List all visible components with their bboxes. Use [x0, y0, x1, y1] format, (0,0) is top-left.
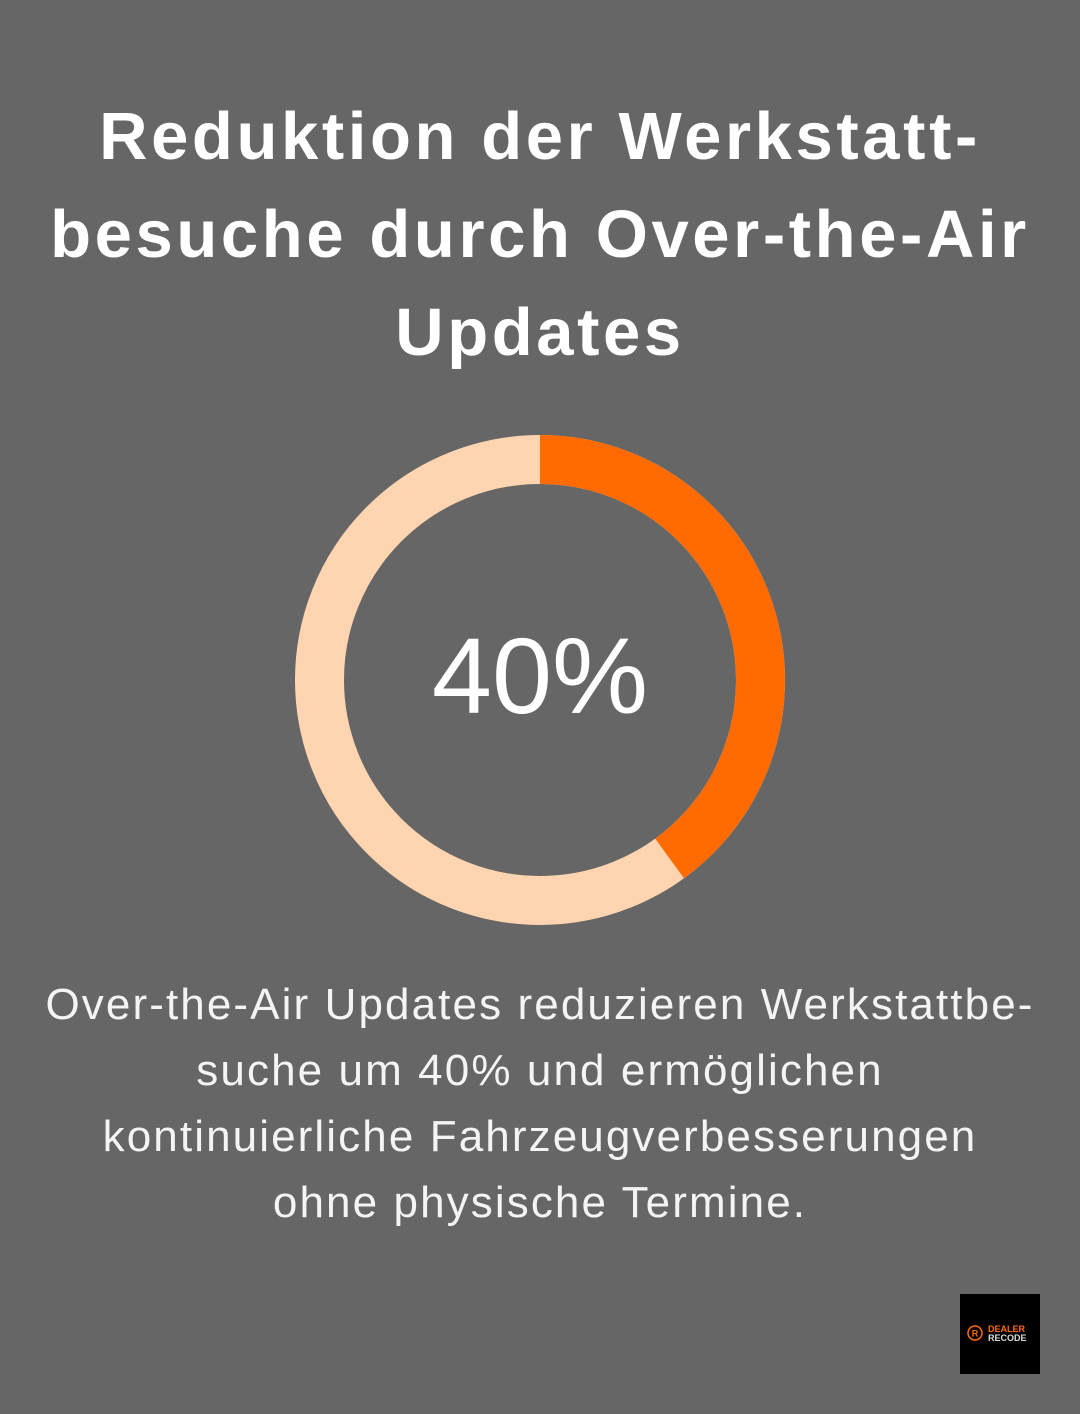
logo — [960, 1294, 1040, 1374]
description text: ohne physische Termine. — [273, 1178, 807, 1227]
logo: DEALER — [988, 1324, 1026, 1334]
description text: Over-the-Air Updates reduzieren Werkstattbe- — [45, 980, 1035, 1029]
logo: R — [972, 1328, 979, 1338]
title — [50, 99, 1030, 370]
donut chart: 40% — [432, 615, 648, 736]
description text: suche um 40% und ermöglichen — [196, 1046, 884, 1095]
title: Reduktion der Werkstatt- — [99, 99, 981, 174]
description text — [45, 980, 1035, 1227]
title: besuche durch Over-the-Air — [50, 197, 1030, 272]
logo: RECODE — [988, 1333, 1027, 1343]
title: Updates — [395, 295, 685, 370]
description text: kontinuierliche Fahrzeugverbesserungen — [103, 1112, 977, 1161]
